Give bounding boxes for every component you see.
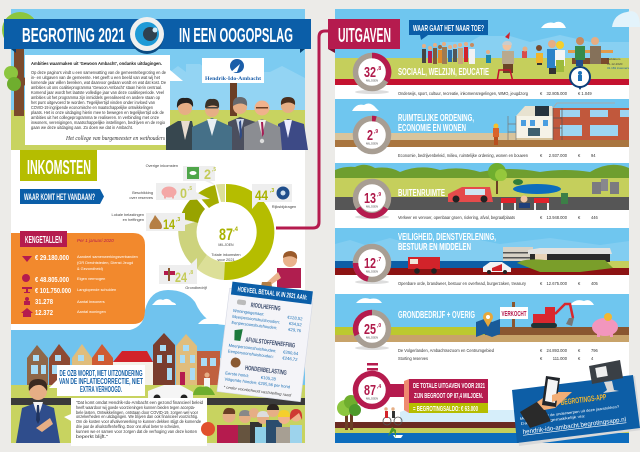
afvalstoffenheffing — [228, 328, 301, 362]
man with hand on chest — [16, 379, 60, 443]
label: grondbedrijf: ,8 — [189, 270, 193, 276]
row: eigen vermogen: € 48.805.000 — [35, 275, 69, 284]
circle: 25,0: MILJOEN — [366, 336, 378, 340]
row: reserves amounts: 111.000 — [553, 356, 568, 361]
peildatum note: 01-12-2020: — [607, 62, 623, 66]
section: veiligheid: VEILIGHEID, DIENSTVERLENING, — [398, 232, 496, 243]
row: reserves amounts: € — [578, 356, 581, 361]
row: economie amounts: € — [540, 153, 543, 158]
section: veiligheid: BESTUUR EN MIDDELEN — [398, 242, 471, 253]
section: ruimtelijke ordening — [335, 99, 629, 158]
circle: 25,0: ,0 — [377, 323, 381, 329]
title banner: BEGROTING 2021 — [22, 25, 125, 47]
circle: 32,8: ,8 — [377, 66, 381, 72]
speech bubble: ambitions — [25, 55, 183, 145]
speech box: OZB: EXTRA VERHOOGD. — [80, 385, 122, 394]
graves — [592, 179, 619, 194]
section: grondbedrijf: GRONDBEDRIJF + OVERIG — [398, 310, 475, 321]
icon: monitor — [589, 360, 623, 393]
speech bubble: ambitions: ambities uit het programma zijn inmiddels gerealiseerd en andere staan op — [31, 95, 161, 100]
speech bubble: ambitions: komende jaar willen bereiken, wat daarvoor gedaan wordt en wat dat kost. De — [31, 80, 167, 85]
flowers and woman — [193, 372, 215, 395]
icon: eye — [130, 17, 164, 54]
sign: Hendrik-Ido-Ambacht — [202, 58, 264, 116]
speech box: OZB: DE OZB WORDT, MET UITZONDERING — [60, 369, 142, 378]
row: economie amounts: Economie, bedrijvenbeleid, milieu, ruimtelijke ordening, wonen en bouwen — [398, 153, 529, 158]
tag: waar gaat het naar toe — [409, 20, 488, 40]
hondenbelasting: * onder voorbehoud vaststelling raad — [223, 384, 292, 398]
icon: pin inwoner — [570, 67, 590, 90]
row: sociaal amounts: 32.805.000 — [546, 91, 568, 96]
callout: totale uitgaven: ZIJN BEGROOT OP 87,4 MILJOEN. — [414, 391, 483, 400]
label: overige inkomsten — [146, 163, 217, 186]
circle: 32,8 — [355, 55, 389, 94]
speech bubble: ambitions: in- en uitgaven van de gemeente. Het geeft u een beeld van wat wij het — [31, 75, 161, 80]
panel: begrotings-app: Meer lezen over de onderwerpen uit deze jaarstukken? — [520, 405, 619, 421]
row: veiligheid amounts: 12.675.000 — [546, 281, 568, 286]
panel: begrotings-app — [512, 360, 640, 446]
hondenbelasting — [223, 356, 296, 398]
heading: inkomsten: INKOMSTEN — [27, 157, 91, 179]
hondenbelasting: €105,28 — [261, 375, 277, 382]
clouds — [541, 11, 640, 28]
label: grondbedrijf: 24 — [175, 269, 187, 285]
rioolheffing: Woningeigenaar: — [233, 308, 265, 317]
afvalstoffenheffing: AFVALSTOFFENHEFFING — [245, 337, 296, 350]
title tag: uitgaven — [328, 19, 400, 53]
circle: total 87,4 — [356, 374, 409, 406]
speech box: OZB — [49, 365, 145, 396]
row: vastgoed amounts: € — [578, 348, 581, 353]
label: overige inkomsten: Overige inkomsten — [146, 163, 178, 168]
circle: 32,8: MILJOEN — [366, 78, 378, 82]
notebook: hoeveel betaal ik — [217, 281, 314, 402]
rioolheffing: Meerpersoonshuishouden: — [232, 314, 280, 325]
panel: begrotings-app: hendrik-ido-ambacht.begrotingsapp.nl — [522, 416, 627, 436]
circle: 12,7: ,7 — [377, 257, 381, 263]
college group — [166, 97, 308, 150]
rioolheffing: €29,76 — [288, 327, 302, 333]
icon: hand with phone — [520, 376, 572, 428]
speech bubble: ambitions: Ambities waarmaken uit 'Gewoon Ambacht', ondanks uitdagingen. — [31, 61, 162, 66]
row: aantal inwoners: Aantal inwoners — [77, 299, 105, 304]
row: langlopende schulden — [22, 286, 116, 295]
panel: begrotings-app: Dat kan heel gemakkelijk via: — [521, 414, 586, 426]
notebook tag: HOEVEEL BETAAL IK IN 2021 AAN: — [237, 286, 307, 302]
quote: "Dat komt omdat Hendrik-Ido-Ambacht een gezond financieel beleid — [76, 400, 204, 405]
label: lokale belastingen — [112, 212, 195, 232]
donut chart: MILJOEN — [218, 243, 234, 247]
label: overige inkomsten: 2 — [204, 166, 211, 182]
section: buitenruimte: BUITENRUIMTE — [398, 188, 445, 199]
title banner: IN EEN OOGOPSLAG — [179, 25, 293, 47]
sign: verkocht: VERKOCHT — [502, 311, 527, 318]
circle: 13,9: ,9 — [377, 192, 381, 198]
label: beschikking over reserves: 0 — [180, 185, 187, 201]
lawn and road — [11, 385, 305, 443]
connector line — [276, 31, 332, 228]
bottom landscape — [335, 407, 629, 443]
row: buitenruimte amounts: Verkeer en vervoer, openbaar groen, riolering, afval, begraafplaats — [398, 215, 515, 220]
fire truck — [408, 257, 440, 274]
elderly woman with kite and scooter — [497, 32, 514, 82]
row: buitenruimte amounts: € — [540, 215, 543, 220]
title banner — [4, 19, 311, 53]
icon: trees — [337, 395, 361, 430]
excavator — [531, 304, 574, 328]
circle: total 87,4: 87 — [364, 382, 376, 399]
row: vastgoed amounts: De Volgerlanden, Ambachtsezoom en Centrumgebied — [398, 348, 495, 353]
speech bubble: ambitions: ambities uit ons coalitieprogramma 'Gewoon Ambacht' staan hierin centraal. — [31, 85, 162, 90]
peildatum note — [607, 57, 630, 70]
row: aantal woningen — [21, 308, 106, 317]
section: veiligheid — [335, 228, 629, 286]
panel: kengetallen — [11, 231, 145, 324]
hondenbelasting: HONDENBELASTING — [245, 365, 287, 377]
label: grondbedrijf — [159, 258, 208, 290]
circle: 2,9: MILJOEN — [366, 142, 378, 146]
hondenbelasting: Eerste hond: — [225, 370, 249, 378]
quote: onzekerheden en uitdagingen. We blijven dan ook financieel voorzichtig. — [76, 414, 198, 419]
row: reserves amounts — [398, 356, 594, 361]
afvalstoffenheffing: €246,72 — [282, 355, 298, 362]
circle: 13,9: 13 — [364, 190, 376, 207]
section: sociaal — [335, 9, 630, 96]
circle: 32,8: 32 — [364, 64, 376, 81]
row: samenwerkingsverbanden — [22, 253, 138, 271]
speech bubble: ambitions: Op deze pagina's vindt u een samenvatting van de gemeentebegroting en de — [31, 70, 167, 75]
circle: 13,9: MILJOEN — [366, 204, 378, 208]
row: samenwerkingsverbanden: Aandeel samenwerkingsverbanden — [77, 254, 138, 259]
quote: kunnen we er samen voor zorgen dat de verhoging van deze kosten — [76, 429, 198, 434]
sign: Hendrik-Ido-Ambacht: Hendrik-Ido-Ambacht — [205, 77, 261, 82]
row: sociaal amounts: Onderwijs, sport, cultuur, recreatie, inkomensregelingen, WMO, jeugdzorg — [398, 91, 529, 96]
label: beschikking over reserves: ,5 — [188, 186, 192, 192]
row: sociaal amounts: € 1.049 — [578, 91, 592, 96]
afvalstoffenheffing: Meerpersoonshuishouden: — [228, 343, 277, 353]
tag: waar komt het vandaan — [20, 189, 104, 204]
row: reserves amounts: Storting reserves — [398, 356, 428, 361]
houses — [27, 333, 230, 385]
row: economie amounts — [398, 153, 596, 158]
town hall — [503, 247, 613, 272]
quote: bele lasten. Ontwikkelingen, ontstaan door COVID-19, zorgen wel voor — [76, 410, 199, 415]
circle: total 87,4: ,4 — [377, 384, 381, 390]
row: sociaal amounts: € — [540, 91, 543, 96]
row: reserves amounts: € — [540, 356, 543, 361]
icon: piggy bank — [592, 313, 618, 337]
row: economie amounts: 94 — [591, 153, 596, 158]
peildatum note: Peildatum — [607, 57, 621, 61]
section: grondbedrijf — [335, 294, 629, 361]
speech bubble: ambitions: het punt uitgevoerd te worden. Tegelijkertijd vinden onder invloed van — [31, 100, 156, 105]
tree and pond — [488, 163, 568, 204]
heading: inkomsten — [20, 150, 97, 181]
label: rijksbijdragen: Rijksbijdragen — [272, 204, 296, 209]
donut chart — [178, 184, 274, 280]
icon: tree — [2, 12, 38, 116]
label: rijksbijdragen: ,3 — [270, 188, 274, 194]
donut chart: Totale inkomsten — [211, 252, 241, 257]
rioolheffing: RIOOLHEFFING — [250, 302, 281, 313]
crowd — [422, 42, 491, 64]
panel: right page — [335, 9, 630, 443]
row: samenwerkingsverbanden: (GR Drechtsteden, Dienst Jeugd — [77, 260, 133, 265]
row: buitenruimte amounts — [398, 215, 599, 220]
car — [448, 187, 493, 202]
quote: drie jaar de afvalstoffenheffing. Door ons afval beter te scheiden, — [76, 424, 180, 429]
tag: waar gaat het naar toe: WAAR GAAT HET NAAR TOE? — [413, 23, 484, 33]
sky and lawn — [11, 9, 305, 150]
callout: totale uitgaven: = BEGROTINGSALDO: € 63.000 — [413, 404, 478, 413]
donut chart: voor 2021 — [217, 257, 235, 262]
circle: 2,9 — [356, 118, 388, 152]
speech bubble: ambitions: Het college van burgemeester en wethouders — [65, 136, 166, 142]
speech box: OZB: VAN DE INFLATIECORRECTIE, NIET — [59, 377, 143, 386]
afvalstoffenheffing: €350,64 — [283, 349, 299, 356]
row: veiligheid amounts: 405 — [591, 281, 599, 286]
circle: 2,9: 2 — [367, 127, 373, 144]
row: vastgoed amounts: 24.893.000 — [546, 348, 568, 353]
row: langlopende schulden: € 101.750.000 — [35, 286, 71, 295]
speech bubble: ambitions: ambities uit het collegeprogramma te realiseren. In verbinding met onze — [31, 115, 160, 120]
row: economie amounts: 2.937.000 — [549, 153, 568, 158]
section: ruimtelijke ordening: RUIMTELIJKE ORDENING, — [398, 113, 474, 124]
quote: Om de kosten voor afvalverwerking te kunnen dekken stijgt de komende — [76, 419, 202, 424]
barriers and worker — [501, 196, 549, 210]
circle: total 87,4: MILJOEN — [366, 396, 378, 400]
row: buitenruimte amounts: 13.948.000 — [546, 215, 568, 220]
afvalstoffenheffing: Eenpersoonshuishouden: — [228, 349, 274, 359]
quote: heeft waardoor wij goede voorzieningen kunnen bieden tegen accepta- — [76, 405, 195, 410]
speech bubble: ambitions: gaan we deze uitdaging aan. Zo doen we dat in Ambacht. — [31, 125, 133, 130]
label: rijksbijdragen: 44 — [255, 187, 268, 203]
tag: waar komt het vandaan: WAAR KOMT HET VANDAAN? — [24, 192, 95, 202]
row: aantal inwoners — [24, 297, 105, 306]
title tag: uitgaven: UITGAVEN — [338, 25, 391, 47]
speech bubble: ambitions: plaats. Het is onze uitdaging hierin mee te bewegen en tegelijkertijd ook de — [31, 110, 165, 115]
label: lokale belastingen: en heffingen — [123, 217, 144, 222]
rioolheffing: Eenpersoonshuishouden: — [231, 320, 277, 330]
section: sociaal: SOCIAAL, WELZIJN, EDUCATIE — [398, 67, 489, 78]
sign: verkocht — [500, 302, 528, 332]
section: ruimtelijke ordening: ECONOMIE EN WONEN — [398, 123, 466, 134]
row: vastgoed amounts: 796 — [591, 348, 599, 353]
speech bubble: ambitions: Komend jaar wordt het laatste volledige jaar van deze coalitieperiode. Veel — [31, 90, 164, 95]
row: buitenruimte amounts: € — [578, 215, 581, 220]
worker — [493, 124, 499, 145]
row: langlopende schulden: Langlopende schulden — [77, 287, 116, 292]
section: buitenruimte — [335, 163, 629, 220]
buildings under construction — [508, 103, 629, 140]
rioolheffing: €34,52 — [289, 321, 303, 327]
label: rijksbijdragen — [252, 184, 296, 209]
callout: totale uitgaven — [404, 379, 488, 413]
row: vastgoed amounts: € — [540, 348, 543, 353]
equals sign — [367, 363, 378, 370]
label: overige inkomsten: ,5 — [212, 167, 216, 173]
hondenbelasting: Volgende honden: €205,56 per hond — [224, 376, 291, 389]
street scene sky — [11, 290, 305, 398]
circle: 25,0: 25 — [364, 321, 376, 338]
donut chart: 87 — [219, 225, 233, 244]
circle: 13,9 — [355, 182, 389, 219]
car — [148, 385, 193, 402]
speech bubble: ambitions: COVID-19 ingrijpende economische en maatschappelijke ontwikkelingen — [31, 105, 154, 110]
row: sociaal amounts — [398, 91, 592, 96]
panel: left page — [2, 9, 314, 446]
rioolheffing — [231, 299, 305, 333]
label: beschikking over reserves — [129, 183, 210, 201]
row: economie amounts: € — [578, 153, 581, 158]
label: beschikking over reserves: Beschikking — [132, 190, 153, 195]
row: veiligheid amounts: Openbare orde, brandweer, bestuur en overhead, burgerzaken, treasury — [398, 281, 527, 286]
quote — [64, 398, 207, 446]
tag: kengetallen: KENGETALLEN — [25, 235, 62, 246]
panel: kengetallen: Per 1 januari 2020 — [77, 238, 114, 243]
label: lokale belastingen: Lokale belastingen — [112, 212, 144, 217]
row: eigen vermogen: Eigen vermogen — [77, 276, 105, 281]
row: buitenruimte amounts: 446 — [591, 215, 599, 220]
row: veiligheid amounts — [398, 281, 599, 286]
label: beschikking over reserves: over reserves — [129, 195, 153, 200]
row: aantal woningen: 12.372 — [35, 308, 53, 317]
rioolheffing: €128,52 — [287, 315, 303, 321]
quote: beperkt blijft." — [76, 434, 109, 439]
couple on bench — [568, 37, 613, 66]
callout: totale uitgaven: DE TOTALE UITGAVEN VOOR 2021 — [413, 381, 485, 390]
row: eigen vermogen — [22, 274, 105, 284]
circle: 2,9: ,9 — [374, 129, 378, 135]
man with money bag — [260, 251, 301, 291]
police car — [483, 262, 511, 274]
row: veiligheid amounts: € — [578, 281, 581, 286]
speech bubble: ambitions: inwoners, verenigingen, maatschappelijke instellingen, bedrijven en de regio — [31, 120, 166, 125]
panel: begrotings-app: BEGROTINGS-APP — [560, 392, 607, 407]
icon: map with pin — [476, 312, 500, 337]
label: lokale belastingen: 14 — [163, 216, 175, 232]
family — [522, 40, 565, 74]
row: vastgoed amounts — [398, 348, 599, 353]
row: samenwerkingsverbanden: & Gezondheid) — [77, 266, 104, 271]
row: aantal inwoners: 31.278 — [35, 297, 53, 306]
row: veiligheid amounts: € — [540, 281, 543, 286]
circle: 12,7: 12 — [364, 255, 376, 272]
row: aantal woningen: Aantal woningen — [77, 309, 106, 314]
donut chart: ,4 — [233, 227, 239, 233]
peildatum note: 31.181 inwoners — [607, 66, 630, 70]
row: reserves amounts: 4 — [591, 356, 594, 361]
circle: 12,7 — [355, 246, 389, 284]
cyclists — [383, 407, 402, 438]
label: lokale belastingen: ,3 — [176, 217, 180, 223]
row: samenwerkingsverbanden: € 29.180.000 — [35, 253, 69, 262]
group of residents — [201, 404, 302, 443]
label: grondbedrijf: Grondbedrijf — [185, 285, 208, 290]
circle: 12,7: MILJOEN — [366, 270, 378, 274]
circle: 25,0 — [355, 312, 389, 350]
